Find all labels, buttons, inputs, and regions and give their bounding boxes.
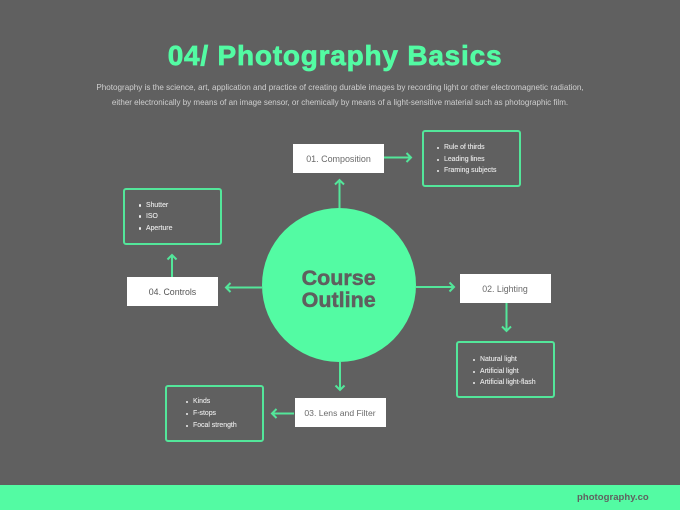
circle label <box>302 266 376 312</box>
arrow: circle to lighting <box>416 282 454 292</box>
list: controls topics: Shutter <box>146 202 168 208</box>
footer brand: photography.co <box>577 492 649 503</box>
arrow: circle to lens <box>336 362 344 390</box>
list: lighting topics: Natural light <box>480 356 517 363</box>
label: 03 lens and filter <box>294 398 386 427</box>
intro text: either electronically by means of an image sensor, or chemically by means of a light-sensitive material such as photographic film. <box>112 98 568 107</box>
list: lens topics: Focal strength <box>193 422 237 429</box>
list: controls topics <box>123 188 222 244</box>
list: composition topics: Rule of thirds <box>444 144 485 151</box>
arrow: circle to composition <box>335 180 344 208</box>
circle label: Outline <box>302 288 376 312</box>
list: composition topics <box>422 130 521 187</box>
label: 04 controls <box>127 277 218 306</box>
list: lighting topics: Artificial light-flash <box>480 379 536 386</box>
list: lighting topics: Artificial light <box>480 368 519 375</box>
label: 02 lighting <box>460 274 550 303</box>
list: lens topics: Kinds <box>193 398 210 405</box>
label: 01 composition: 01. Composition <box>306 154 371 164</box>
label: 03 lens and filter: 03. Lens and Filter <box>304 408 376 418</box>
arrow: controls to list <box>168 255 176 277</box>
footer bar <box>0 485 680 510</box>
intro text: Photography is the science, art, application and practice of creating durable images by recording light or other electromagnetic radiation, <box>96 83 584 92</box>
list: composition topics: Framing subjects <box>444 167 496 174</box>
arrow: lens to list <box>272 409 294 418</box>
arrow: composition to list <box>384 153 411 162</box>
list: controls topics: Aperture <box>146 224 172 232</box>
arrow: circle to controls <box>226 283 262 292</box>
list: lighting topics <box>456 341 555 398</box>
intro text <box>96 83 584 107</box>
list: lens topics: F-stops <box>193 410 216 417</box>
label: 02 lighting: 02. Lighting <box>482 284 528 294</box>
center circle <box>262 208 416 362</box>
title: 04/ Photography Basics <box>168 40 502 71</box>
label: 04 controls: 04. Controls <box>149 287 196 297</box>
list: composition topics: Leading lines <box>444 156 485 163</box>
arrow: lighting to list <box>502 303 511 331</box>
list: controls topics: ISO <box>146 212 158 220</box>
circle label: Course <box>302 266 376 290</box>
label: 01 composition <box>293 144 384 173</box>
list: lens topics <box>165 385 264 442</box>
